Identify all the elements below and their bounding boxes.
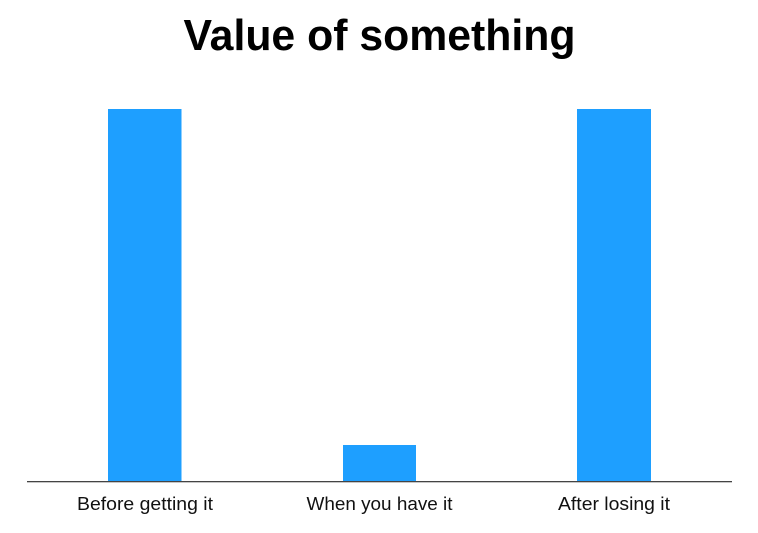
bar: before getting it	[108, 109, 182, 482]
bar: after losing it	[577, 109, 651, 482]
bar: when you have it	[343, 445, 416, 482]
label: before getting it: Before getting it	[77, 493, 213, 514]
title: Value of something	[184, 11, 576, 60]
bar chart	[27, 109, 732, 514]
x axis	[27, 481, 732, 482]
label: after losing it: After losing it	[558, 493, 670, 514]
label: when you have it: When you have it	[306, 493, 452, 514]
